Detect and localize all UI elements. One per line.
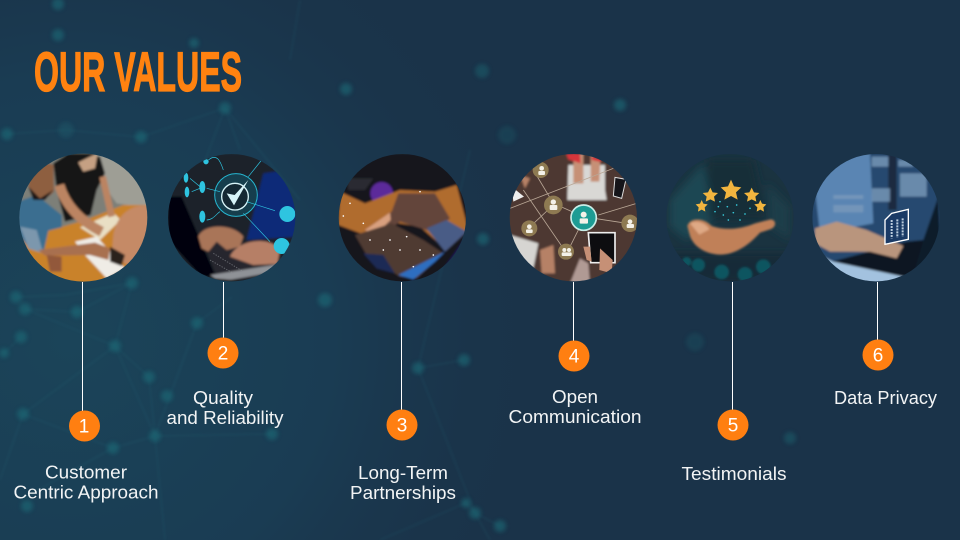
connector line bbox=[572, 282, 574, 341]
photo: team shaking hands bbox=[17, 150, 150, 287]
number badge bbox=[386, 410, 418, 440]
number badge bbox=[862, 340, 894, 370]
number badge bbox=[558, 340, 590, 372]
title: OUR VALUES bbox=[34, 40, 242, 103]
value 2: quality and reliability bbox=[166, 153, 300, 428]
label: and Reliability bbox=[166, 408, 284, 428]
connector line bbox=[82, 282, 84, 411]
connector line bbox=[876, 282, 878, 340]
label bbox=[508, 387, 642, 427]
label: Centric Approach bbox=[14, 482, 158, 502]
photo: typing with document icon bbox=[812, 153, 942, 285]
value 1: customer centric approach bbox=[14, 150, 158, 503]
label: Data Privacy bbox=[834, 388, 937, 408]
number badge: 1 bbox=[79, 416, 89, 438]
label: Open bbox=[552, 387, 598, 407]
number badge bbox=[69, 410, 100, 442]
label bbox=[14, 462, 158, 502]
photo: digital checkmark over laptop bbox=[167, 153, 300, 283]
photo: hand holding five stars bbox=[665, 153, 795, 283]
number badge: 2 bbox=[218, 344, 228, 364]
photo: connected devices on a table bbox=[508, 153, 642, 283]
label: Communication bbox=[508, 407, 642, 427]
number badge: 3 bbox=[397, 416, 407, 436]
value 5: testimonials bbox=[665, 153, 795, 484]
label: Quality bbox=[193, 388, 253, 408]
number badge bbox=[208, 338, 238, 368]
connector line bbox=[732, 282, 734, 410]
label: Testimonials bbox=[682, 464, 786, 484]
number badge bbox=[718, 410, 748, 440]
connector line bbox=[222, 282, 224, 338]
label: Partnerships bbox=[350, 483, 456, 503]
photo: digital handshake bbox=[337, 153, 470, 283]
label bbox=[350, 463, 456, 503]
connector line bbox=[400, 282, 402, 410]
number badge: 6 bbox=[873, 346, 883, 366]
value 3: long-term partnerships bbox=[337, 153, 470, 503]
number badge: 5 bbox=[728, 416, 738, 436]
label bbox=[166, 388, 284, 428]
label: Customer bbox=[45, 462, 127, 482]
label: Long-Term bbox=[358, 463, 448, 483]
value 4: open communication bbox=[508, 153, 642, 427]
number badge: 4 bbox=[569, 346, 580, 368]
value 6: data privacy bbox=[812, 153, 942, 408]
